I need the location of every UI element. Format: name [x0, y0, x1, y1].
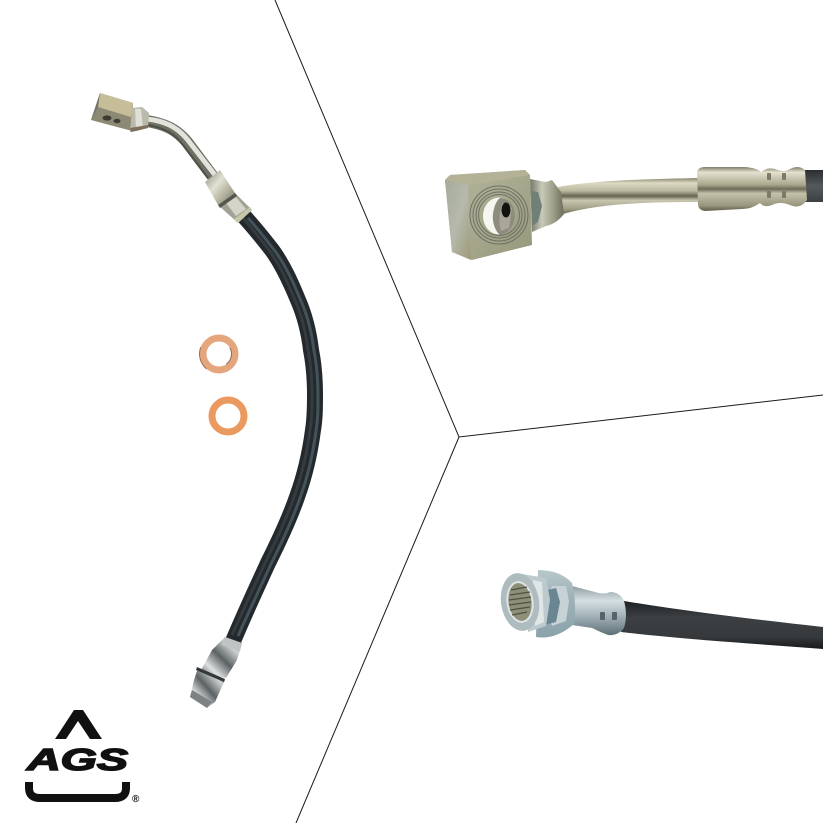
collar [530, 179, 564, 232]
bore hole [502, 202, 510, 218]
crimp ferrule [572, 586, 626, 635]
detail: threaded end of hose [497, 570, 823, 649]
hose [621, 601, 823, 649]
panel dividers [275, 0, 823, 823]
banjo block fitting [91, 93, 149, 132]
lower washer [212, 400, 244, 432]
lower crimped fitting [190, 637, 242, 708]
AGS logo [25, 710, 140, 805]
bore [483, 198, 515, 234]
logo top chevron [55, 710, 102, 739]
black rubber hose [231, 212, 318, 646]
logo wordmark: AGS [25, 742, 128, 777]
copper washers [192, 327, 246, 432]
upper washer [192, 327, 246, 381]
full brake hose assembly [91, 93, 318, 708]
crimped sleeve [697, 167, 807, 211]
detail: banjo end of hose [445, 167, 823, 260]
machined rings [470, 186, 528, 244]
upper crimped sleeve [205, 170, 252, 223]
crimp notches [767, 173, 786, 198]
logo bottom bracket [29, 782, 126, 798]
steel tube [558, 178, 702, 214]
threaded opening [497, 571, 550, 633]
registered mark: ® [132, 794, 140, 805]
square block [445, 170, 532, 260]
hose stub [803, 170, 823, 202]
bent steel tube [147, 119, 215, 178]
hex flange [536, 570, 575, 637]
